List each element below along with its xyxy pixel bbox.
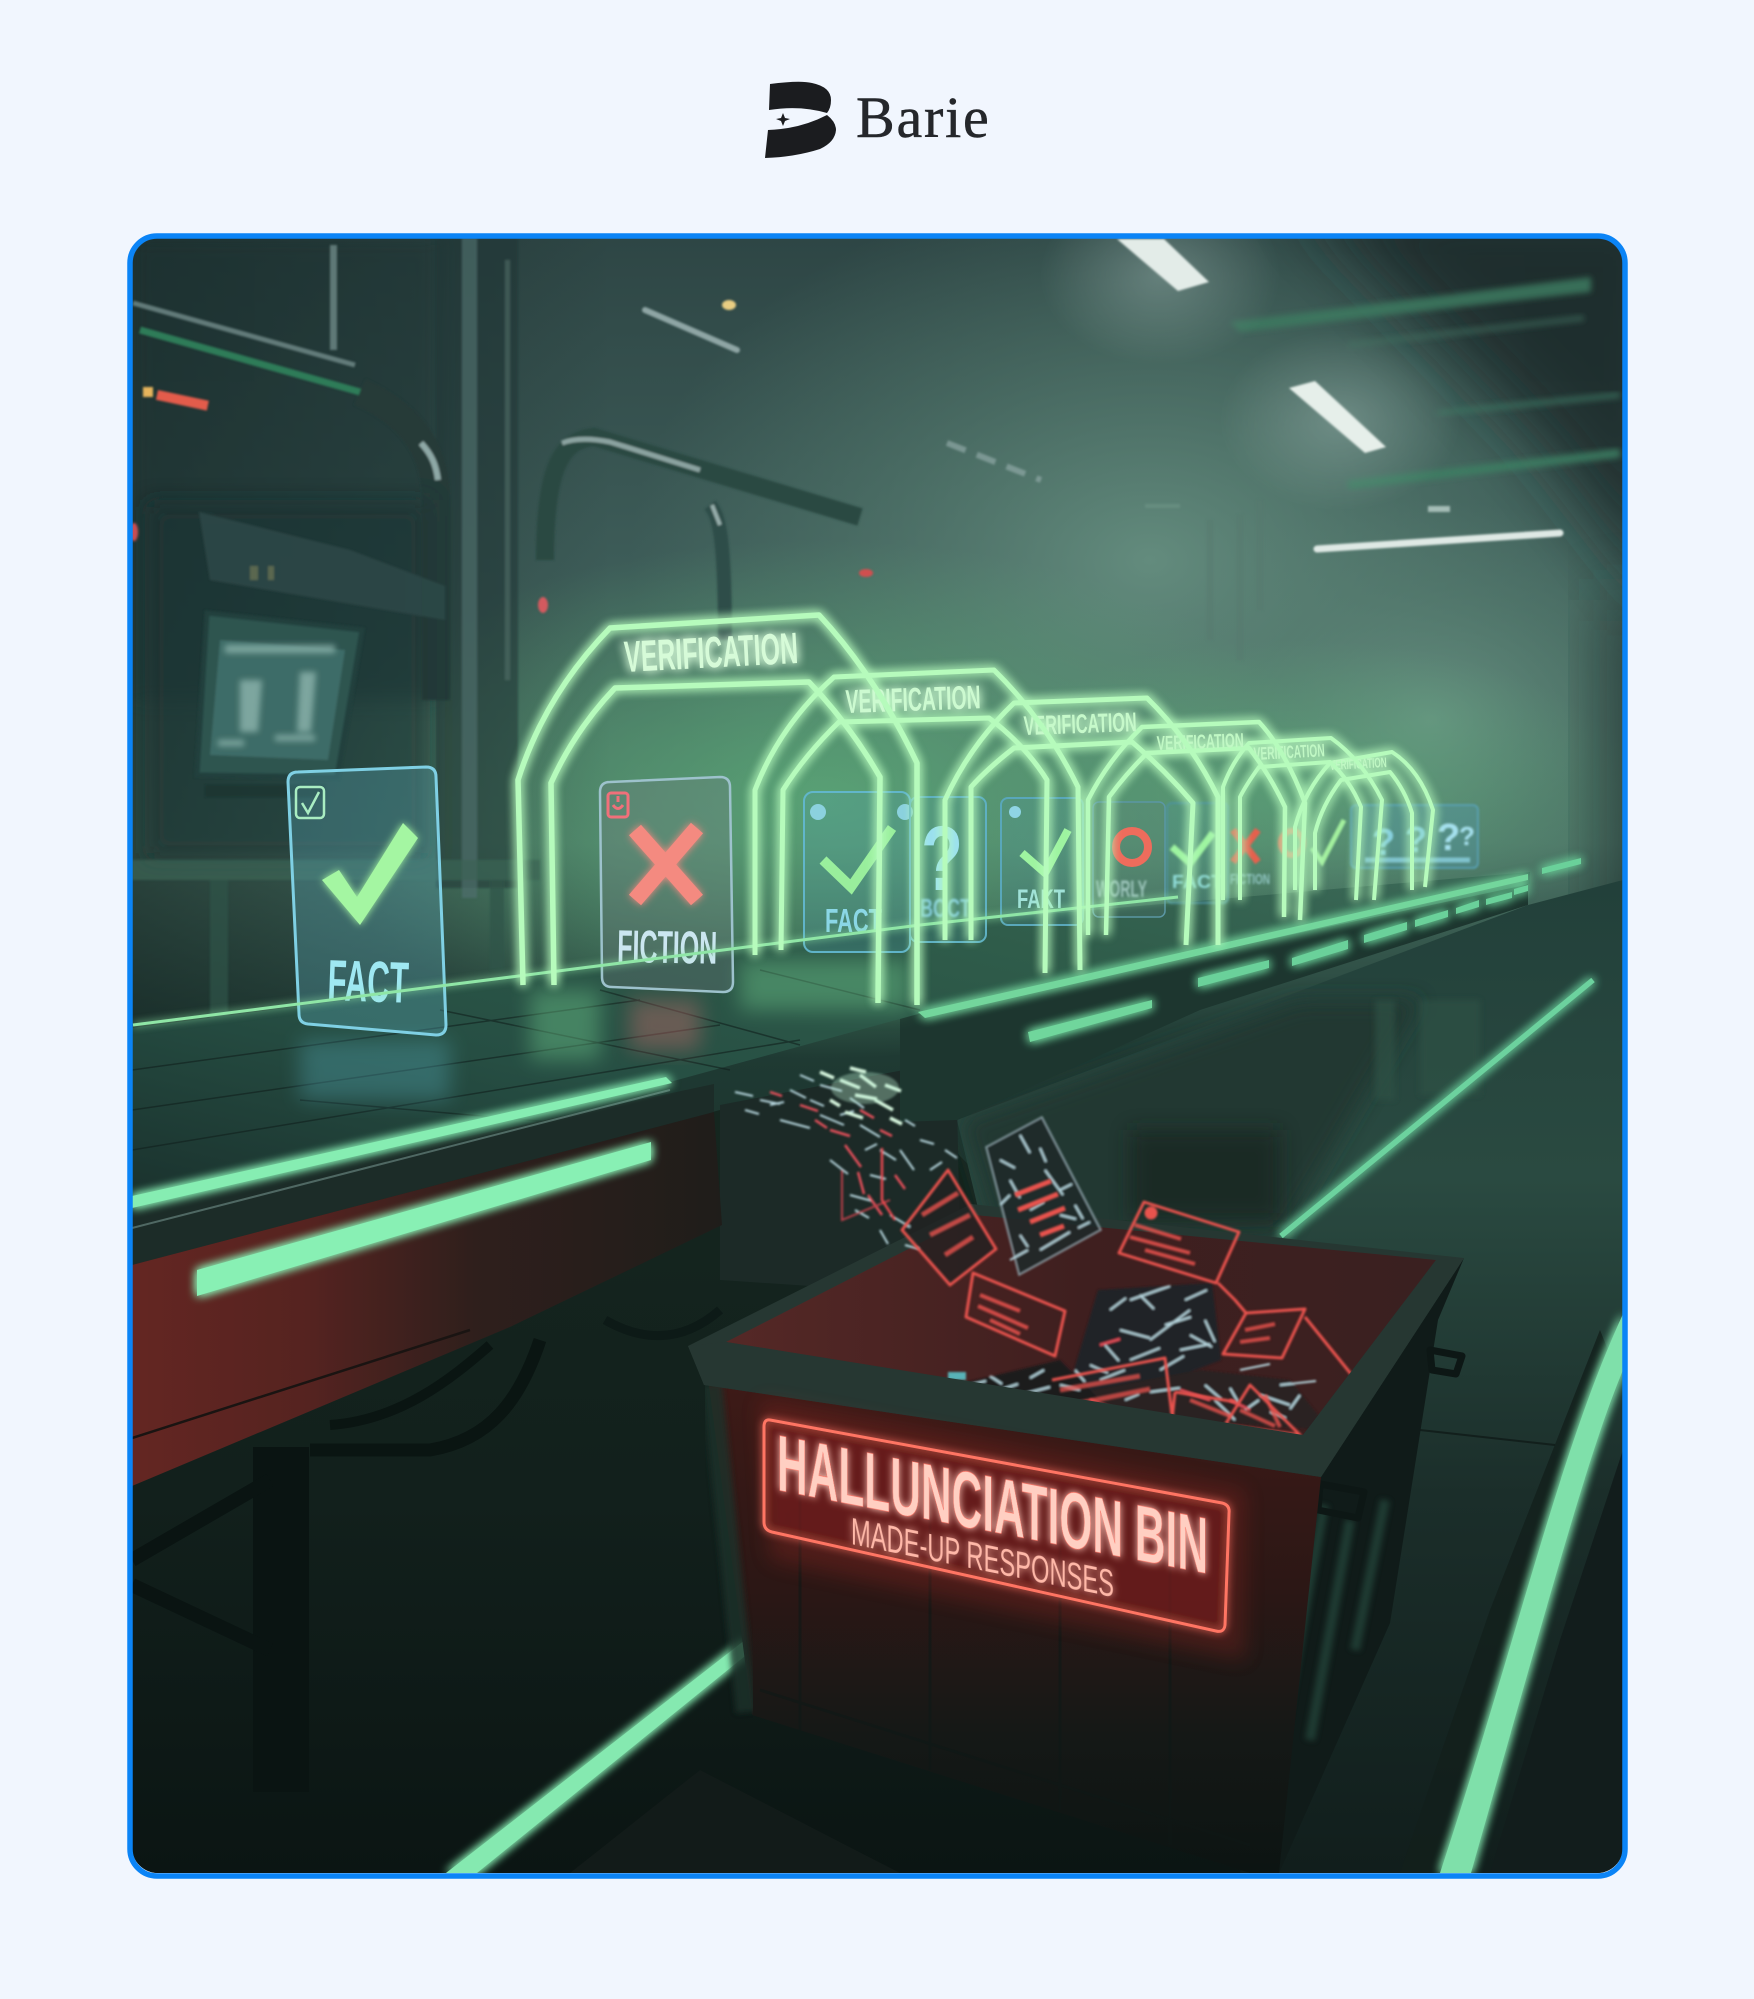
conveyor: front red face	[132, 1084, 722, 1486]
verification arches	[518, 615, 1433, 1005]
panel: scene illustration with blue border	[130, 180, 1730, 1876]
icon: red cross	[635, 828, 697, 900]
icon: small checkbox	[296, 787, 324, 818]
card: FAKT	[1001, 798, 1083, 925]
distant cards row	[1167, 803, 1478, 903]
label: FAKT: FAKT	[1017, 884, 1065, 914]
label: verification arch 4: VERIFICATION	[1156, 730, 1244, 755]
floor right side and conveyor support	[957, 880, 1623, 1873]
icon: question mark: ?	[921, 808, 963, 910]
distant cards row: FICTION	[1230, 871, 1270, 888]
bin back rim	[688, 1204, 1464, 1477]
distant cards row: ?	[1405, 819, 1427, 860]
distant cards row: FACT	[1172, 872, 1223, 892]
card: FACT second	[804, 792, 913, 952]
icon: large check mark	[322, 823, 418, 925]
monitor: background screen	[197, 613, 362, 797]
label: blurred tag: WORLY	[1096, 876, 1147, 903]
label: FICTION: FICTION	[617, 920, 718, 974]
label: verification arch 3: VERIFICATION	[1023, 707, 1137, 741]
arch 6	[1295, 752, 1433, 890]
broken glass shards	[735, 1068, 1330, 1430]
wordmark: Barie: Barie	[856, 85, 991, 150]
bin front face	[708, 1378, 1321, 1873]
discarded response cards	[902, 1170, 1351, 1435]
arch 3	[945, 698, 1218, 945]
distant cards row: ?	[1372, 822, 1395, 864]
line on belt back edge	[133, 897, 1178, 1025]
arch 5	[1223, 738, 1382, 900]
bin front rim	[688, 1258, 1464, 1477]
label: verification arch 5: VERIFICATION	[1253, 740, 1325, 764]
ceiling lights and beams	[946, 238, 1622, 554]
hallucination bin	[688, 1068, 1464, 1873]
label: blurred tag: BOCT	[920, 893, 971, 923]
sign glow	[760, 1400, 1245, 1660]
shard chute box	[720, 1060, 960, 1290]
logo: Barie	[765, 82, 991, 158]
card: red ring	[1093, 802, 1165, 917]
floor guide lines	[446, 980, 1623, 1873]
icon: red ring	[1116, 831, 1148, 863]
card: question mark	[910, 797, 986, 942]
bin handles	[1318, 1350, 1462, 1518]
card: FICTION	[600, 777, 733, 992]
icon: Barie B mark with star	[765, 82, 836, 158]
icon: check	[1022, 830, 1068, 873]
arch 2	[755, 670, 1080, 973]
arch 1	[518, 615, 917, 1005]
heading: HALLUNCIATION BIN: HALLUNCIATION BIN	[777, 1419, 1208, 1592]
label: verification arch 2: VERIFICATION	[845, 678, 981, 720]
subheading: MADE-UP RESPONSES: MADE-UP RESPONSES	[851, 1510, 1114, 1606]
glowing strips on the conveyor	[132, 858, 1581, 1296]
label: FACT: FACT	[327, 948, 410, 1016]
arch 4	[1088, 722, 1305, 935]
background: industrial hall	[132, 180, 1730, 1873]
under-table dark area	[133, 1110, 977, 1873]
label: FACT: FACT	[825, 902, 882, 939]
sign: Hallunciation Bin	[764, 1419, 1229, 1631]
distant cards row: ?	[1437, 817, 1460, 859]
bin interior	[726, 1215, 1436, 1435]
conveyor: far section side	[900, 880, 1528, 1122]
label: verification arch 6: VERIFICATION	[1329, 754, 1387, 773]
distant cards row: ?	[1459, 821, 1475, 851]
icon: check	[823, 828, 892, 887]
bin right side	[1240, 1258, 1464, 1873]
icon: small red badge	[608, 793, 628, 817]
conveyor: table top	[132, 872, 1530, 1154]
label: verification arch 1: VERIFICATION	[623, 624, 799, 682]
blue panel border	[130, 236, 1625, 1876]
card: FACT	[288, 767, 446, 1035]
left machinery: pipes, pillars, lights	[132, 238, 874, 1018]
